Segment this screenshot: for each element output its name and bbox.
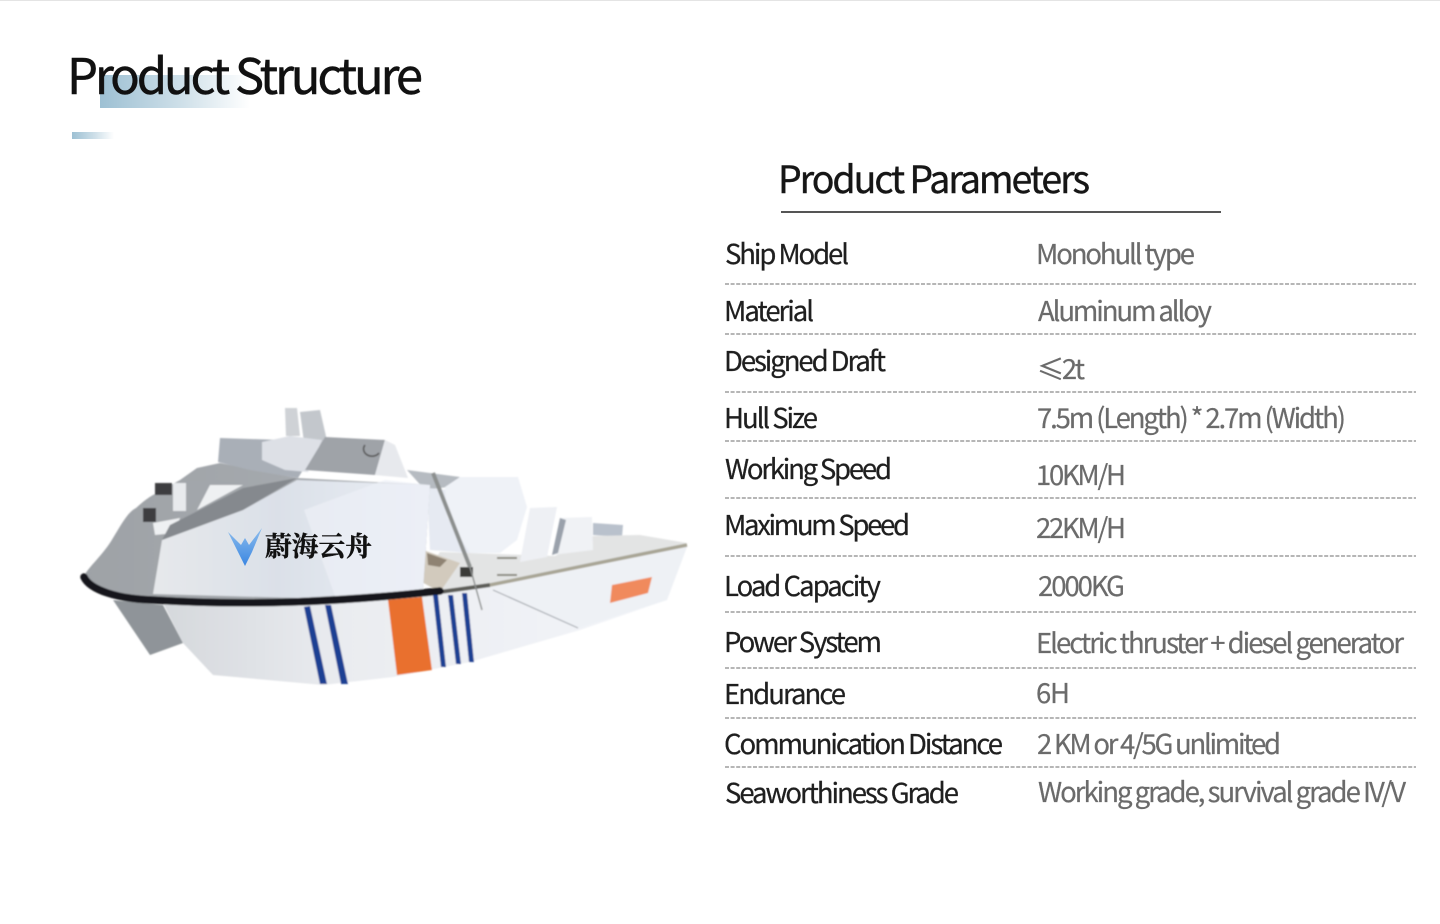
heading: Product Parameters: Product Parameters (778, 149, 1090, 204)
row: seaworthiness grade: Working grade, survival grade IV/V (1038, 770, 1406, 810)
row: load capacity: Load Capacity (724, 564, 881, 604)
deck (420, 535, 687, 592)
row: seaworthiness grade: Seaworthiness Grade (725, 771, 959, 811)
row: hull size: 7.5m (Length) * 2.7m (Width) (1037, 396, 1346, 436)
row: ship model: Ship Model (725, 232, 849, 272)
bow superstructure (83, 463, 430, 602)
row: material: Aluminum alloy (1038, 289, 1212, 329)
main white face (153, 480, 430, 598)
icon: logo mark (228, 528, 262, 566)
row: communication distance: Communication Distance (724, 722, 1003, 762)
row: designed draft (724, 339, 1085, 387)
rub rail (84, 577, 440, 603)
row: load capacity: 2000KG (1038, 564, 1125, 604)
row: maximum speed: Maximum Speed (724, 503, 910, 543)
row: ship model (725, 232, 1195, 272)
row: maximum speed (724, 503, 1126, 546)
hull keel fin (113, 600, 183, 655)
row: communication distance: 2 KM or 4/5G unlimited (1037, 722, 1281, 762)
row: designed draft: ≤2t (1037, 347, 1085, 387)
hull stripes (304, 606, 327, 684)
bracket (418, 550, 460, 592)
heading: Product Structure: Product Structure (67, 38, 423, 109)
row: load capacity (724, 564, 1125, 604)
row: maximum speed: 22KM/H (1036, 506, 1126, 546)
row: working speed (725, 447, 1126, 493)
row: seaworthiness grade (725, 770, 1406, 811)
row: endurance: Endurance (724, 672, 846, 712)
deck edge (440, 585, 490, 592)
logo: 蔚海云舟: 蔚海云舟 (265, 525, 372, 564)
row: communication distance (724, 722, 1281, 762)
row: power system: Power System (724, 620, 882, 660)
row: endurance (724, 671, 1070, 712)
rope (433, 473, 470, 567)
illustration: unmanned surface vessel (83, 408, 687, 685)
row: power system: Electric thruster + diesel generator (1036, 621, 1404, 661)
stern side panel (493, 547, 687, 628)
row: hull size: Hull Size (724, 396, 818, 436)
row: working speed: Working Speed (725, 447, 892, 487)
cabin rear panels (407, 470, 460, 490)
side camera mounts (180, 480, 243, 512)
stern orange mark (610, 577, 652, 603)
row: power system (724, 620, 1404, 661)
row: designed draft: Designed Draft (724, 339, 886, 379)
parameter table (724, 232, 1416, 811)
row: endurance: 6H (1036, 671, 1070, 711)
row: material (724, 289, 1212, 329)
mast and sensor housing (285, 408, 300, 436)
row: ship model: Monohull type (1036, 232, 1195, 272)
lower hull (163, 545, 687, 685)
row: hull size (724, 396, 1346, 436)
row: material: Material (724, 289, 814, 329)
row: working speed: 10KM/H (1036, 453, 1126, 493)
